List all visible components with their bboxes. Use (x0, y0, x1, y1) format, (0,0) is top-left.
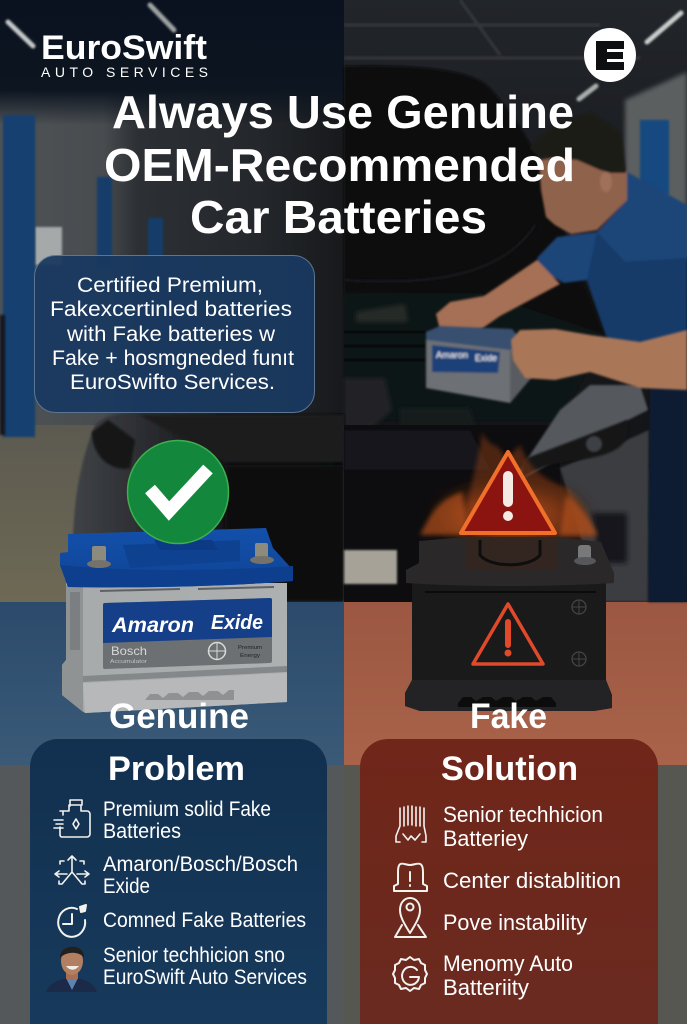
text: senior technician: EuroSwift Auto Services (103, 966, 307, 989)
icon: red warning triangle (461, 452, 555, 533)
label: Fake: Fake (470, 697, 547, 736)
label: Genuine: Genuine (109, 697, 249, 736)
mechanic legs (648, 385, 687, 602)
genuine battery: Premium (238, 645, 262, 651)
genuine battery: Accumulator (110, 659, 147, 665)
text: amaron bosch: Exide (103, 875, 150, 898)
text: premium solid: Premium solid Fake (103, 798, 271, 821)
title: Car Batteries (190, 191, 487, 243)
text: center: Center distablition (443, 868, 621, 893)
callout panel: EuroSwifto Services. (70, 371, 275, 394)
battery held by mechanic (426, 326, 536, 403)
open hood underside (344, 66, 605, 335)
genuine battery label (103, 598, 272, 669)
callout panel: Fakexcertinled batteries (50, 298, 292, 321)
callout panel: Certified Premium, (77, 274, 263, 297)
text: senior technician battery: Batteriey (443, 826, 528, 851)
title (104, 86, 575, 243)
genuine battery: Bosch (111, 644, 147, 658)
genuine battery: Exide (211, 612, 263, 634)
car body left (73, 414, 344, 602)
heading: solution: Solution (441, 750, 578, 788)
logo: EuroSwift: EuroSwift (41, 29, 207, 67)
text: senior technician: Senior techhicion sno (103, 944, 285, 967)
genuine battery lid (60, 528, 293, 587)
icon: timer (58, 905, 86, 937)
callout panel: Fake + hosmgneded funıt (52, 347, 294, 370)
battery held by mechanic: Amaron (436, 350, 468, 360)
fake battery (405, 537, 614, 711)
windshield and engine bay (344, 293, 605, 420)
battery held by mechanic: Exide (475, 353, 497, 363)
logo badge: E (584, 28, 636, 82)
warning triangle on fake battery (473, 604, 543, 664)
text: amaron bosch (103, 853, 298, 898)
callout panel: with Fake batteries w (66, 323, 276, 346)
background: left workshop (0, 0, 344, 602)
text: comned: Comned Fake Batteries (103, 909, 306, 932)
background: right workshop (344, 0, 687, 602)
icon: technician portrait (46, 947, 97, 992)
icon: warning arch (394, 864, 427, 891)
genuine battery: Energy (240, 653, 261, 659)
text: menomy (443, 951, 573, 1000)
text: menomy: Batteriity (443, 975, 529, 1000)
car body right (344, 425, 560, 602)
logo: EuroSwift: AUTO SERVICES (41, 64, 208, 80)
text: senior technician battery (443, 802, 603, 851)
panel: problem (30, 739, 327, 1024)
mechanic (436, 112, 687, 602)
mechanic forearm and gripping hand (511, 329, 687, 390)
text: senior technician (103, 944, 307, 989)
icon: gear (393, 957, 427, 991)
mechanic shirt (537, 172, 687, 347)
licence plate (344, 550, 397, 584)
icon: location pin (395, 898, 426, 937)
icon: battery (54, 800, 90, 837)
flames (420, 432, 598, 551)
icon: arrows (55, 856, 89, 884)
genuine battery: Amaron (111, 614, 194, 637)
text: pove instability: Pove instability (443, 910, 587, 935)
title: Always Use Genuine (112, 86, 574, 138)
heading: problem: Problem (108, 750, 245, 788)
text: premium solid: Batteries (103, 820, 181, 843)
floor colour bands (0, 602, 687, 1024)
icon: gloved hand (396, 806, 426, 842)
panel: solution (360, 739, 658, 1024)
mechanic upper arm and hand (436, 260, 560, 332)
callout panel (34, 256, 314, 412)
mechanic head (539, 150, 627, 234)
genuine battery (60, 528, 293, 713)
car with open hood (73, 66, 649, 602)
title: OEM-Recommended (104, 139, 575, 191)
text: amaron bosch: Amaron/Bosch/Bosch (103, 853, 298, 876)
text: premium solid (103, 798, 271, 843)
icon: green check (128, 440, 228, 544)
text: senior technician battery: Senior techhicion (443, 802, 603, 827)
genuine battery body (62, 583, 287, 713)
text: menomy: Menomy Auto (443, 951, 573, 976)
